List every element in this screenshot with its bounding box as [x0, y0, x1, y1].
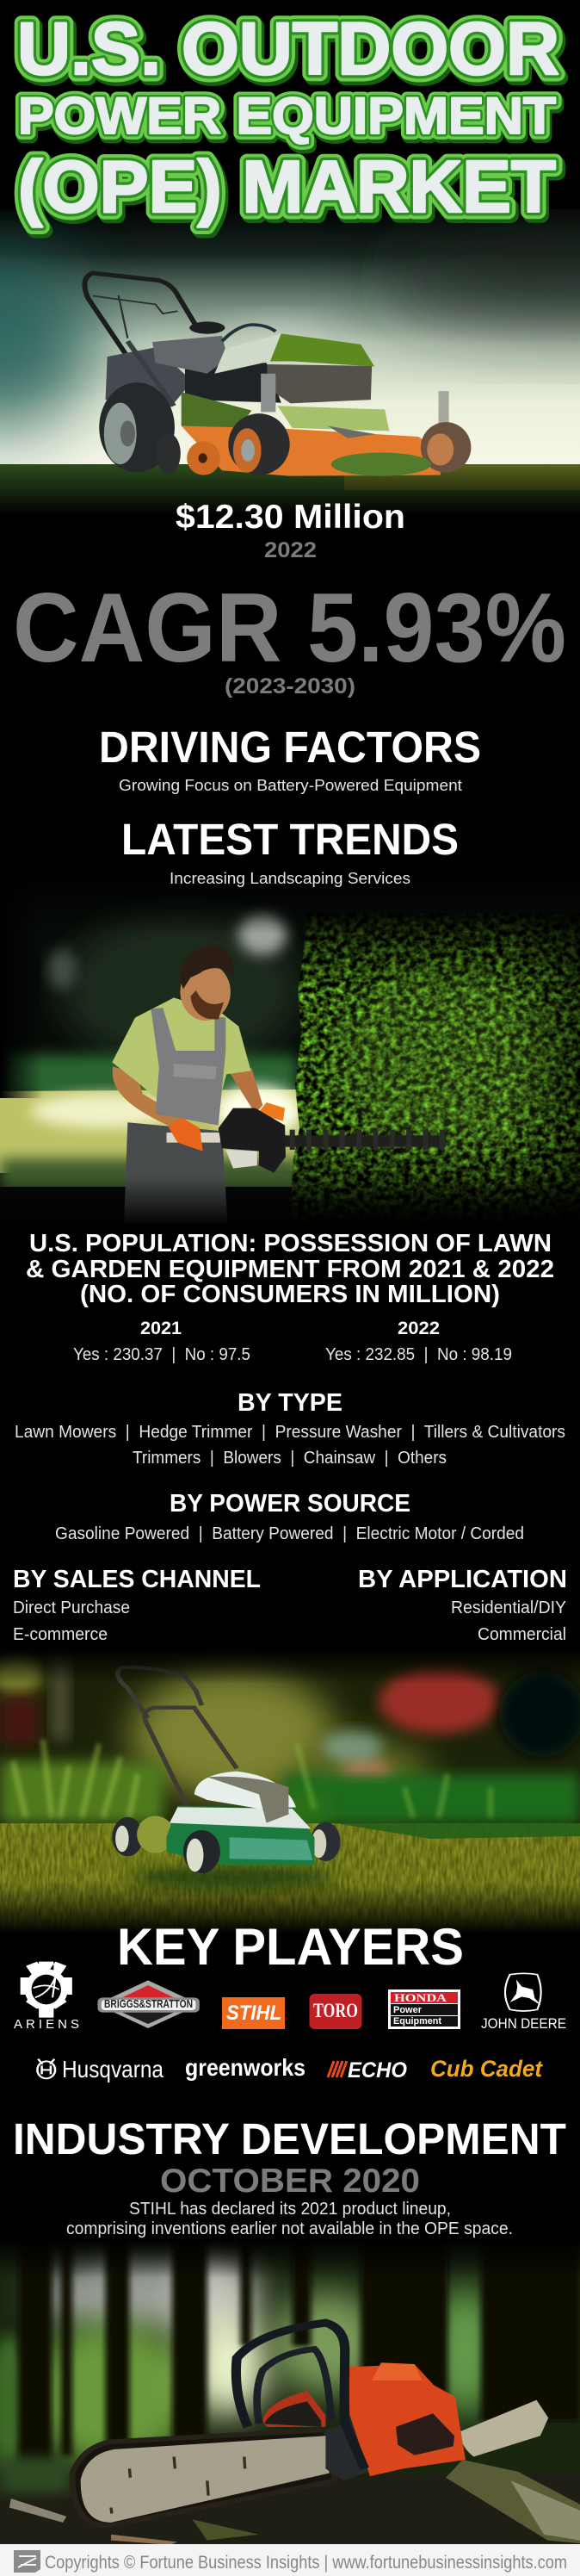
segment: by power source — [55, 1490, 524, 1543]
logo: Greenworks: greenworks — [185, 2054, 305, 2081]
logo: John Deere — [481, 1973, 566, 2032]
segment: by application: BY APPLICATION — [358, 1566, 567, 1593]
title line: U.S. OUTDOOR: U.S. OUTDOOR — [17, 8, 559, 90]
title line: U.S. OUTDOOR: U.S. OUTDOOR — [17, 8, 559, 90]
ground grass — [0, 464, 580, 510]
footer bar — [0, 2544, 580, 2576]
photo fades — [0, 874, 580, 1227]
sunlit lawn — [0, 1089, 301, 1173]
segment: by sales channel — [13, 1566, 261, 1644]
logo: Toro — [310, 1994, 361, 2029]
title line: POWER EQUIPMENT: POWER EQUIPMENT — [18, 87, 556, 145]
text: latest trend: Increasing Landscaping Services — [170, 869, 410, 887]
segment: by application: Commercial — [478, 1625, 566, 1644]
title line: POWER EQUIPMENT: POWER EQUIPMENT — [20, 90, 558, 148]
logo: Toro: TORO — [313, 2000, 358, 2021]
segment: by sales channel: Direct Purchase — [13, 1598, 130, 1617]
year column 2022: 2022 — [398, 1319, 440, 1338]
logo: Stihl: STIHL — [226, 2002, 281, 2025]
forest floor — [0, 2400, 580, 2547]
logo: Cub Cadet: Cub Cadet — [430, 2056, 543, 2082]
development description: STIHL has declared its 2021 product lineup, — [129, 2200, 451, 2219]
logo: Ariens — [14, 1962, 79, 2032]
segment: by type: BY TYPE — [238, 1389, 342, 1417]
year column 2021: Yes : 230.37 | No : 97.5 — [73, 1345, 250, 1364]
lawn — [0, 1823, 580, 1942]
heading: U.S. population possession: & GARDEN EQUIPMENT FROM 2021 & 2022 — [26, 1256, 554, 1283]
segment: by type: Trimmers | Blowers | Chainsaw | Others — [133, 1449, 447, 1468]
segment: by power source: Gasoline Powered | Battery Powered | Electric Motor / Corded — [55, 1524, 524, 1543]
text: driving factor: Growing Focus on Battery-Powered Equipment — [119, 776, 462, 794]
logo: Honda Power Equipment: Power — [393, 2005, 423, 2015]
logo: John Deere: JOHN DEERE — [481, 2015, 566, 2032]
logo: Echo: ECHO — [348, 2058, 408, 2083]
title line: (OPE) MARKET: (OPE) MARKET — [18, 146, 556, 228]
title line: U.S. OUTDOOR: U.S. OUTDOOR — [17, 8, 559, 90]
photo top fade — [0, 2239, 580, 2278]
icon: electric push mower — [112, 1667, 341, 1873]
logo: Stihl — [222, 1997, 285, 2029]
title line: POWER EQUIPMENT: POWER EQUIPMENT — [18, 87, 556, 145]
icon: Fortune Business Insights mark — [14, 2550, 40, 2573]
title — [17, 8, 562, 232]
heading: key players: KEY PLAYERS — [117, 1918, 464, 1976]
segment: by sales channel: E-commerce — [13, 1625, 108, 1644]
heading: industry development: INDUSTRY DEVELOPMENT — [13, 2114, 566, 2163]
segment: by type — [15, 1389, 565, 1468]
tree trunks — [15, 2244, 580, 2461]
development description — [66, 2200, 513, 2238]
CAGR period: (2023-2030) — [225, 674, 355, 698]
logo: Husqvarna: Husqvarna — [62, 2056, 164, 2083]
icon: chainsaw — [72, 2323, 466, 2526]
market size year: 2022 — [264, 538, 317, 562]
title line: POWER EQUIPMENT: POWER EQUIPMENT — [18, 87, 556, 145]
title line: U.S. OUTDOOR: U.S. OUTDOOR — [20, 11, 562, 94]
foreground plants — [0, 1740, 580, 1823]
heading: U.S. population possession: U.S. POPULATION: POSSESSION OF LAWN — [29, 1230, 552, 1257]
heading: U.S. population possession — [26, 1230, 554, 1308]
logo: Honda Power Equipment: HONDA — [394, 1991, 447, 2004]
photo top fade — [0, 1649, 580, 1684]
photo: ride mower on lawn — [0, 209, 580, 519]
year column 2021 — [73, 1319, 250, 1364]
segment: by power source: BY POWER SOURCE — [170, 1490, 410, 1518]
year column 2022: Yes : 232.85 | No : 98.19 — [325, 1345, 512, 1364]
segment: by application — [358, 1566, 567, 1644]
logo: Honda Power Equipment — [388, 1989, 460, 2029]
photo: gardener trimming hedge — [0, 874, 580, 1227]
logo: Briggs & Stratton: BRIGGS&STRATTON — [104, 1997, 193, 2010]
heading: latest trends: LATEST TRENDS — [121, 815, 459, 864]
title line: (OPE) MARKET: (OPE) MARKET — [18, 146, 556, 228]
heading: U.S. population possession: (NO. OF CONSUMERS IN MILLION) — [80, 1281, 500, 1308]
segment: by sales channel: BY SALES CHANNEL — [13, 1566, 261, 1593]
title line: (OPE) MARKET: (OPE) MARKET — [18, 146, 556, 228]
hedge foliage — [284, 913, 580, 1223]
logo: Honda Power Equipment: Equipment — [393, 2016, 441, 2027]
segment: by application: Residential/DIY — [451, 1598, 566, 1617]
gardener figure — [112, 946, 446, 1223]
development date: OCTOBER 2020 — [160, 2163, 420, 2200]
market size value: $12.30 Million — [176, 499, 405, 536]
title line: (OPE) MARKET: (OPE) MARKET — [21, 150, 558, 232]
photo: electric mower in garden — [0, 1649, 580, 1942]
year column 2021: 2021 — [140, 1319, 182, 1338]
development description: comprising inventions earlier not available in the OPE space. — [66, 2219, 513, 2238]
logo: Ariens: ARIENS — [14, 2017, 79, 2032]
icon: petrol lawn mower — [84, 273, 471, 476]
segment: by type: Lawn Mowers | Hedge Trimmer | Pressure Washer | Tillers & Cultivators — [15, 1423, 565, 1442]
photo: chainsaw in forest — [0, 2230, 580, 2547]
logo: Briggs & Stratton — [97, 1980, 200, 2028]
heading: driving factors: DRIVING FACTORS — [99, 723, 481, 772]
year column 2022 — [325, 1319, 512, 1364]
